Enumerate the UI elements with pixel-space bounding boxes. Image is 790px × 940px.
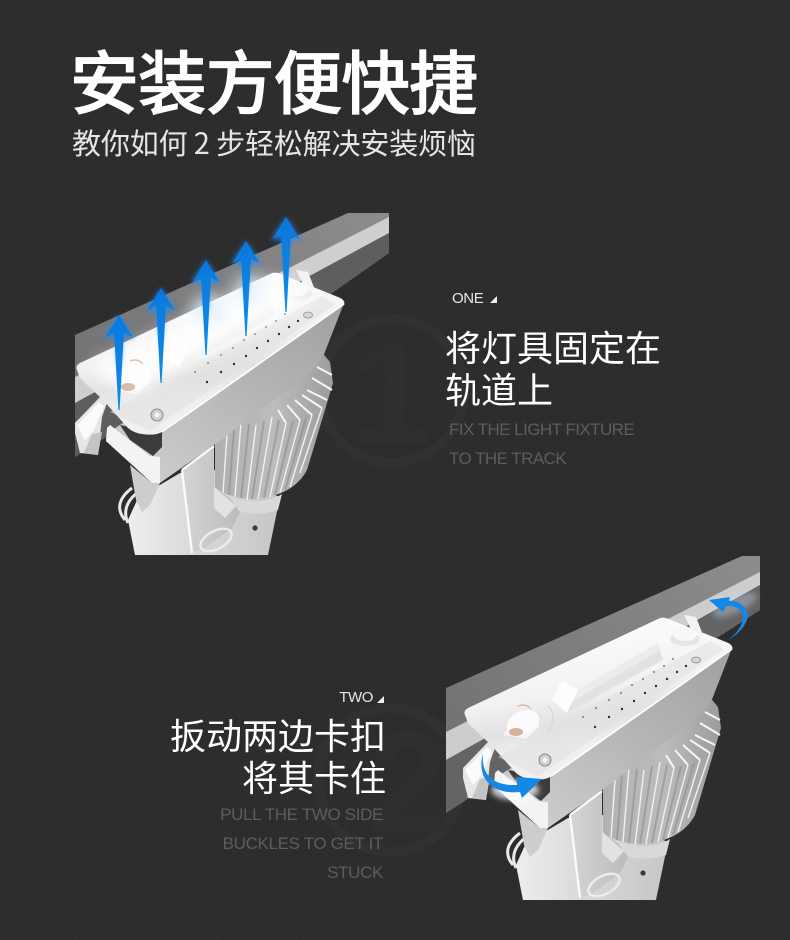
step two english caption: BUCKLES TO GET IT <box>223 834 383 853</box>
marker triangle <box>377 696 384 703</box>
plate glow <box>90 276 315 395</box>
step two heading: 扳动两边卡扣 <box>170 708 386 760</box>
subtitle: 教你如何 2 步轻松解决安装烦恼 <box>72 121 476 163</box>
step two english caption: PULL THE TWO SIDE <box>220 805 383 824</box>
step two label: TWO <box>339 689 373 706</box>
step one heading: 轨道上 <box>445 362 553 414</box>
step two heading <box>170 708 386 802</box>
step one illustration <box>75 213 389 556</box>
watermark: number 1 <box>320 313 464 475</box>
marker triangle <box>490 296 497 303</box>
step one label <box>452 290 497 307</box>
step two english caption <box>220 805 384 882</box>
blue arrow: bottom left clip <box>481 753 542 800</box>
watermark: number 1: 1 <box>352 313 432 475</box>
step one heading <box>445 320 661 414</box>
step two illustration <box>446 556 760 901</box>
blue arrows up <box>104 217 301 410</box>
light fixture <box>463 615 732 901</box>
track rail <box>446 556 760 813</box>
step one english caption: FIX THE LIGHT FIXTURE <box>449 420 634 439</box>
step one label: ONE <box>452 290 484 307</box>
watermark: number 2: 2 <box>368 701 448 863</box>
blue arrow: top right clip <box>709 588 760 640</box>
track rail <box>75 213 389 457</box>
bolt redrawn over glow <box>121 360 143 391</box>
watermark: number 2 <box>318 701 462 863</box>
step one english caption: TO THE TRACK <box>449 449 567 468</box>
step one english caption <box>449 420 634 468</box>
step two english caption: STUCK <box>327 863 384 882</box>
step one heading: 将灯具固定在 <box>445 320 661 372</box>
light fixture <box>75 270 344 556</box>
step two heading: 将其卡住 <box>242 750 386 802</box>
title: 安装方便快捷 <box>70 28 478 128</box>
